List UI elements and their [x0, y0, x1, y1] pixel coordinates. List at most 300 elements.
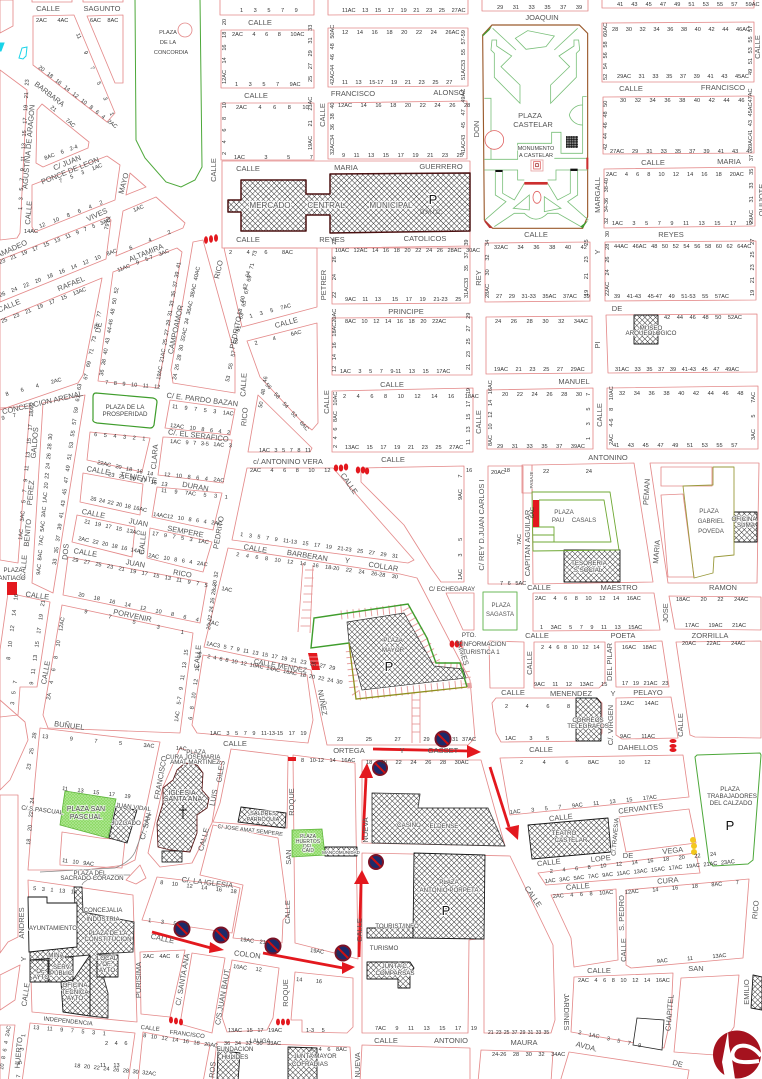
house numbers: 19 21 23 25	[584, 239, 590, 296]
building and plaza labels: AYTO	[33, 974, 49, 981]
house numbers: 9AC 8AC 7AC 5AC 3AC 1AC 20 22 24 26 28 30	[36, 433, 54, 575]
street names: CALLE	[248, 18, 272, 27]
building and plaza labels: A CASTELAR	[519, 153, 553, 159]
ayuntamiento building	[28, 897, 77, 952]
house numbers: 28AC 30 32 34	[485, 240, 491, 298]
arrow: Nueva north	[359, 763, 373, 840]
street names: DE	[671, 1058, 684, 1069]
house numbers: 8 10-12 14 16AC	[301, 758, 355, 764]
building and plaza labels: ELDENSE	[430, 823, 458, 830]
house numbers: 2 4 6 8	[505, 704, 570, 710]
house numbers: 2 4 6 8AC 10 12	[520, 760, 650, 766]
house numbers: 2A 4 6 8 10 12AC	[46, 617, 67, 700]
house numbers: 2 4 6 8AC	[229, 250, 293, 256]
street names: CERVANTES	[618, 801, 664, 816]
house numbers: 2AC 4-6 8 10AC	[609, 386, 615, 445]
street names: C/. VIRGEN	[606, 705, 615, 745]
street names: COLLAR	[368, 560, 399, 573]
building and plaza labels: SACRADO CORAZON	[60, 875, 124, 882]
house numbers: 1AC	[133, 204, 145, 214]
parking symbols: P	[442, 903, 450, 918]
street names: JUAN	[125, 557, 146, 570]
house numbers: 16 18	[466, 468, 510, 474]
house numbers: 41 43 45 47 49 51 53 55 57 59AC	[617, 2, 759, 8]
street names: MARIA	[334, 163, 358, 172]
building and plaza labels: PROSPERIDAD	[102, 411, 148, 418]
house numbers: 2AC 4 6 8 10 12 14 16AC	[535, 596, 641, 602]
bollards: Jaimes	[450, 640, 464, 648]
logo white band	[722, 1031, 735, 1079]
house numbers: 9 7	[1, 413, 17, 422]
house numbers: 29 27 25 23 21 19 17 15 13 11 9 7 5 3 1AC	[72, 557, 233, 594]
building and plaza labels: C/ ECHEGARAY	[429, 586, 475, 593]
street names: CALLE MENDEZ	[253, 658, 308, 675]
street names: FRANCISCO	[152, 755, 169, 800]
house numbers: 56 58 54 52 6AC	[264, 382, 309, 432]
house numbers: 19AC 21	[240, 937, 266, 946]
street names: PONCE DE LEON	[40, 155, 100, 186]
street names: GUERRERO	[419, 162, 463, 171]
house numbers: 27AC 29 31 33 35 37 39 41 43 45	[610, 149, 752, 155]
street names: MARIA	[717, 157, 741, 166]
house numbers: 2AC 4AC	[36, 18, 68, 24]
house numbers: 42 44 46 48 50	[603, 101, 609, 150]
house numbers: 24-26 28 30 32 34AC	[492, 1052, 565, 1058]
inner black building outline	[633, 1018, 664, 1050]
street names: Y	[19, 956, 28, 962]
house numbers: 41AC43 45 47 49AC	[461, 89, 467, 155]
water feature	[0, 43, 27, 59]
street names: AVDA.	[575, 1039, 598, 1054]
building and plaza labels: LALIGA	[249, 1039, 271, 1045]
building and plaza labels: SERV.	[53, 964, 71, 971]
building and plaza labels: PUBLIC.	[50, 970, 74, 977]
street names: CALLE	[73, 546, 98, 559]
street names: NUÑEZ	[316, 689, 329, 716]
street names: CASALS	[572, 517, 596, 524]
house numbers: 30 32 34 36 38 40 42 44 46	[620, 98, 744, 104]
building and plaza labels: AYTO	[99, 967, 115, 974]
street names: DOS	[60, 543, 71, 560]
building and plaza labels: CURA JOSEMARIA	[166, 754, 221, 761]
house numbers: 1AC 3AC 5AC 7AC 9AC 11AC 13AC 15AC 17AC 19AC 21AC 23AC	[545, 859, 735, 885]
no parking signs	[174, 732, 450, 960]
street names: CALLE	[150, 932, 175, 945]
barrier: Pau Casals	[533, 500, 539, 527]
house numbers: 2 4 6 8 10 12 14 16 18 20 22 24	[550, 852, 717, 875]
house numbers: 8AC 10 12 14 16 18 20 22AC	[345, 319, 446, 325]
street names: CALLE	[39, 660, 52, 685]
house numbers: 20 18 16 14 12 10 8 6 4 2AC	[78, 592, 219, 628]
logo	[713, 1030, 761, 1079]
house numbers: 58 60 62 64	[237, 271, 252, 315]
house numbers: 1AC 3 5 7	[234, 155, 313, 161]
small red bar	[288, 757, 296, 761]
street names: CALLE	[355, 918, 364, 942]
street names: CALLE	[339, 471, 360, 496]
house numbers: 21 23 25 27 29	[466, 313, 472, 370]
building and plaza labels: CORREOS	[572, 717, 604, 724]
sign 7	[436, 732, 450, 746]
street names: ALONSO	[433, 88, 465, 97]
saldres parroquia	[238, 807, 286, 828]
house numbers: 12AC 14 16 18 20	[222, 19, 228, 84]
street names: SAN	[284, 849, 293, 865]
street names: C/ E. PARDO BAZAN	[166, 391, 239, 408]
house numbers: 19 21 23 25 27	[750, 239, 756, 296]
building and plaza labels: SALDRES	[250, 811, 276, 817]
street names: MANUEL	[558, 377, 590, 386]
building and plaza labels: PLAZA	[159, 30, 177, 36]
building and plaza labels: C/.S.PASCUAL	[21, 804, 64, 817]
building and plaza labels: MINA	[48, 952, 65, 959]
street names: MAYO	[116, 172, 131, 195]
arrow: Colon east	[263, 953, 355, 974]
house numbers: 23 21 19 17 15 13 11 9 7 5 3AC	[0, 218, 112, 266]
house numbers: 19AC 21AC 25 27 29 31 33 35 37 39 41	[156, 262, 183, 380]
house numbers: 2 4 6 8 10 12 14 16 18AC	[343, 394, 479, 400]
house numbers: 1AC 3 5 7 9AC 11 13 15 17AC	[510, 795, 657, 816]
junta comparsas	[367, 962, 414, 988]
street names: RICO	[239, 407, 250, 427]
house numbers: 18 20 22 24 26 28 30 32AC	[74, 1063, 156, 1078]
building and plaza labels: PLAZA DEL	[73, 870, 107, 877]
street names: FRANCISCO	[701, 83, 745, 92]
street names: CALLE	[86, 464, 111, 477]
street names: CALLE	[381, 455, 405, 464]
street names: SEMPERE	[167, 524, 204, 539]
house numbers: 20 22 24 26 28 30	[502, 392, 582, 398]
house numbers: 79 81	[104, 216, 112, 230]
plaza San Pascual	[60, 791, 116, 838]
street names: VEGA	[662, 845, 684, 856]
house numbers: 3AC 5 7AC	[751, 392, 757, 440]
house numbers: 1-3 5	[306, 1028, 325, 1034]
house numbers: 6 8 10 12 14 16	[188, 651, 204, 720]
street names: COLON	[234, 948, 261, 961]
house numbers: 2AC 4 6 8 10AC	[553, 890, 613, 900]
street names: CALLE	[548, 812, 573, 823]
plaza de la Concordia	[135, 0, 202, 187]
street names: C/. EL SERAFICO	[167, 427, 229, 444]
street names: JOSE	[661, 603, 670, 623]
street names: SAGUNTO	[84, 4, 121, 13]
house numbers: 20 18 16 14 12 10 8 6 4 2AC	[37, 65, 118, 130]
building and plaza labels: OF.	[102, 961, 112, 968]
building and plaza labels: MAYOR	[382, 647, 405, 654]
street names: DE	[612, 304, 622, 313]
house numbers: 37AC	[462, 737, 476, 743]
street names: GALDOS	[29, 427, 40, 459]
building and plaza labels: SANTA ANA	[164, 796, 203, 803]
street names: Y	[610, 689, 616, 698]
bollards: San Roque	[276, 1019, 290, 1025]
street names: NUEVA	[353, 1052, 362, 1078]
tesoreria seguridad social	[564, 550, 620, 582]
house numbers: 28 30 32 34 36 38 40 42 44 46AC	[612, 27, 750, 33]
street names: CALLE	[536, 857, 561, 868]
house numbers: 2 4 6 8 10	[222, 102, 228, 155]
street names: c/.ANTONINO VERA	[253, 457, 323, 466]
street names: CALLE	[524, 230, 548, 239]
street names: DE	[623, 851, 633, 860]
street names: PURISIMA	[134, 962, 143, 998]
building and plaza labels: CONCEJALIA	[84, 907, 123, 914]
street names: RICO	[750, 900, 761, 920]
street names: CALLE	[137, 531, 148, 555]
street names: GILES	[214, 760, 227, 783]
street names: CONCEPCION ARENAL	[1, 389, 84, 416]
house numbers: 39 41-43 45-47 49 51-53 55 57AC	[614, 294, 729, 300]
house numbers: 12 14 16 18 20 22 24 26AC	[342, 30, 459, 36]
house numbers: 9AC 7	[458, 474, 464, 500]
street names: S. PEDRO	[617, 895, 626, 931]
street names: ORTEGA	[333, 746, 365, 755]
street names: POETA	[611, 631, 635, 640]
arrow: Nueva south	[354, 870, 369, 957]
house numbers: 10AC 12	[233, 964, 262, 973]
street names: DURAN	[182, 480, 209, 493]
plaza Castelar	[483, 25, 588, 228]
building and plaza labels: OFICINA	[731, 516, 757, 523]
street names: JOAQUIN	[525, 13, 559, 22]
plaza del Sagrado Corazon road	[40, 812, 150, 885]
street names: CALLE	[209, 158, 218, 182]
street names: CALLE	[374, 1036, 398, 1045]
building and plaza labels: CAID	[302, 848, 314, 854]
building and plaza labels: TRABAJADORES	[707, 793, 757, 800]
house numbers: 12 10 8 6 4 2	[39, 200, 104, 230]
house numbers: 2AC 4 6 8 10 12 14 16 18 20AC	[606, 172, 744, 178]
street names: BUÑUEL	[54, 719, 85, 732]
building and plaza labels: PLAZA	[383, 637, 404, 644]
house numbers: 27 29 31-33 35AC 37AC 39	[496, 294, 590, 300]
street names: CALLE	[525, 631, 549, 640]
street names: GASSET	[428, 746, 459, 755]
building and plaza labels: CASINO	[397, 822, 421, 829]
building and plaza labels: DEL CALZADO	[710, 800, 753, 807]
barrier: Calle Mendez	[308, 653, 320, 670]
house numbers: 9 7 5 3 1	[84, 609, 184, 636]
house numbers: 23 25 27 29 31	[337, 737, 458, 743]
plaza Mayor	[311, 604, 467, 699]
house numbers: 25 27 29 31 33	[308, 25, 314, 82]
street names: CALLE	[641, 158, 665, 167]
building and plaza labels: ARQUEOLOGICO	[626, 330, 677, 337]
house numbers: 1AC 5-7 9 11 13 15	[174, 649, 190, 722]
street names: AGUSTINA DE ARAGON	[20, 104, 37, 189]
olive outline	[349, 643, 467, 699]
green outline	[311, 604, 467, 687]
street names: CALLE	[527, 583, 551, 592]
house numbers: 2 4 6 8 10 12 14	[541, 645, 599, 651]
house numbers: 9 11 13 15 17 19 21 23 25	[342, 153, 463, 159]
house numbers: 9AC 11 13	[345, 297, 381, 303]
building and plaza labels: JUAN VIDAL	[115, 802, 152, 813]
street names: SAGASTA	[486, 612, 514, 618]
house numbers: 8 10 12 14 16	[6, 594, 20, 660]
house numbers: 2AC 22 20 18 16 14AC	[78, 536, 145, 556]
house numbers: 10AC 12AC 14 16 18 20 22 24 26 28AC 30AC	[335, 248, 480, 254]
street names: SAN	[688, 964, 704, 973]
street names: LUIS	[208, 789, 219, 807]
house numbers: 11 13 15 17 19	[62, 786, 131, 800]
street names: CAPITAN AGUILAR	[523, 509, 532, 576]
building and plaza labels: JUNTA C.	[381, 963, 409, 970]
street names: CALLE	[501, 688, 525, 697]
plaza Pau Casals	[532, 492, 619, 551]
cross on church	[179, 805, 187, 819]
plaza de la constitucion	[30, 887, 134, 1018]
sign 3	[266, 938, 280, 954]
house numbers: 16AC 18AC	[622, 645, 657, 651]
house numbers: 7 6 5AC	[500, 581, 526, 587]
street names: CALLE	[474, 410, 483, 434]
sign 2	[214, 928, 228, 942]
parking symbols: P	[726, 818, 734, 833]
house numbers: 3 5 7	[10, 680, 19, 705]
plaza Gabriel Poveda	[683, 467, 734, 578]
house numbers: 29 31 33 35 37 39	[497, 5, 582, 11]
house numbers: 6 4 2	[129, 230, 172, 252]
street names: C/. SANTA ANA	[174, 953, 192, 1006]
street names: BARBARA	[33, 79, 66, 109]
house numbers: 1 3 5 9	[148, 918, 189, 929]
building and plaza labels: AMAT MARTINEZ	[170, 759, 220, 766]
street names: ZORRILLA	[692, 631, 728, 640]
house numbers: 36 38 40 43 44-46 48 50 52	[99, 287, 121, 376]
plaza hatched block	[347, 613, 466, 690]
logo white swoosh	[732, 1046, 761, 1062]
house numbers: 22 24 26 28	[332, 238, 338, 298]
street names: ROS	[207, 1061, 218, 1078]
street names: ANDRES	[17, 907, 26, 939]
house numbers: 1 3 5 7 9	[240, 8, 298, 14]
street names: NUEVA	[361, 817, 370, 843]
building and plaza labels: PLAZA DE LA	[89, 930, 128, 937]
house numbers: 49 51 53 55 57	[748, 26, 754, 75]
house numbers: 12AC 14 16 18 8AC 7	[625, 880, 739, 896]
street names: CALLE	[322, 390, 331, 414]
building and plaza labels: TECNICA	[61, 989, 89, 996]
street names: CALLE	[753, 35, 762, 59]
plaza Trabajadores del Calzado	[695, 753, 761, 866]
house numbers: 2 4 6 8AC	[310, 1047, 347, 1053]
house numbers: 2 4 6 8 10 12 10AC 14AC 16AC 18 20 22 24 30	[207, 654, 343, 686]
house numbers: 8AC 10 12 14 16AC	[488, 380, 494, 446]
house numbers: 22 24	[543, 469, 592, 475]
house numbers: 11AC 13 15 17 19 21 23 25 27AC	[342, 8, 466, 14]
teatro castelar	[528, 818, 611, 859]
juzgado	[109, 807, 137, 843]
building and plaza labels: C/ JOSE AMAT SEMPERE	[217, 824, 283, 838]
house numbers: 26 24 22 20 18 16 14 12 10 8AC	[0, 248, 118, 299]
house numbers: 1 3 5 7 9 11 13 15 17 19 21 23	[18, 79, 31, 210]
building and plaza labels: S.SOCIAL	[574, 567, 603, 574]
street names: PELAYO	[633, 688, 663, 697]
street names: PLAZA	[518, 111, 542, 120]
house numbers: 7AC	[517, 534, 523, 545]
sign 1	[174, 922, 190, 936]
street names: CALLE	[529, 745, 553, 754]
building and plaza labels: PLAZA DE LA	[106, 404, 145, 411]
building and plaza labels: OFICINA	[62, 982, 88, 989]
house numbers: 15 17 19 21-23 25	[392, 297, 461, 303]
street names: REYES	[658, 230, 684, 239]
street names: POVEDA	[698, 528, 725, 535]
street names: EMILIO	[742, 979, 751, 1005]
house numbers: 14 16	[296, 977, 322, 985]
house numbers: 32AC34 36 38 40	[330, 102, 336, 155]
arrow: Colon west	[152, 932, 224, 953]
house numbers: 13AC 15 17 19AC	[228, 1028, 282, 1034]
street names: CASTELAR	[513, 120, 553, 129]
house numbers: 50 48 46	[258, 376, 269, 408]
building and plaza labels: PLAZA SAN	[67, 806, 105, 813]
house numbers: 9AC 11 13AC	[657, 953, 727, 965]
street names: CALLE	[196, 827, 211, 852]
building and plaza labels: PTO.	[462, 632, 476, 639]
house numbers: 7 5 3 1	[16, 1034, 27, 1078]
house numbers: 8 10 12 14 16 18	[160, 880, 237, 895]
house numbers: 2AC 4 6 8 10 12	[250, 468, 330, 474]
street names: PETRER	[319, 269, 328, 300]
street names: PAU	[552, 517, 564, 524]
barrier: Santiago	[7, 582, 17, 595]
street names: MAURA	[510, 1038, 538, 1047]
building and plaza labels: AYUNTAMIENTO	[29, 925, 77, 932]
house numbers: 29AC 31 33 35 37 39 41 43 45AC	[617, 74, 749, 80]
house numbers: 11 10 9AC	[62, 858, 94, 868]
mancomunidad	[325, 847, 357, 856]
building and plaza labels: PLAZA	[720, 786, 741, 793]
house numbers: 41 43 45 47 49 51 53 55 57	[613, 443, 737, 449]
house numbers: 12 10 8 6 4 2AC	[164, 472, 225, 484]
building and plaza labels: FUNDACION	[217, 1046, 253, 1053]
building and plaza labels: C/.TRAVESIA	[610, 817, 621, 856]
oficinas ayuntamiento	[30, 960, 48, 982]
street names: CLARA	[149, 444, 160, 470]
street names: CALLE	[236, 235, 260, 244]
castelar dark grid	[566, 136, 578, 148]
street names: PLAZA	[699, 508, 720, 515]
house numbers: 33 35 37 39 41 43 45 47 49 51 53 55 57 59 61 63	[52, 383, 83, 565]
parking symbols: P	[429, 192, 437, 207]
street names: PEREZ	[25, 480, 36, 506]
street names: VIVES	[85, 206, 109, 223]
street names: TENIENTE	[119, 470, 157, 485]
red and black bars	[483, 26, 588, 228]
street names: Y	[344, 556, 351, 565]
street names: CALLE	[525, 651, 534, 675]
house numbers: 17 9 7 5 3 1AC	[152, 531, 209, 546]
house numbers: 2AC 10 8 6 4 2AC	[148, 553, 208, 568]
street names: RAMON	[709, 583, 737, 592]
street names: REY	[474, 270, 483, 286]
house numbers: 1AC 3 5	[458, 538, 464, 580]
street names: C/. SAN	[138, 812, 153, 841]
street names: LOPE	[590, 853, 611, 864]
street names: PEDRITO	[211, 515, 226, 550]
house numbers: 21 23 25 37 29 31 33 35	[488, 1030, 549, 1036]
street names: PLAZA	[491, 603, 511, 609]
street names: C/S.JUAN BAUT.	[213, 967, 232, 1026]
street names: ROQUE	[287, 788, 296, 816]
house numbers: 1AC 3AC 5 7 9 11 13 15 17 18AC	[18, 403, 36, 540]
house numbers: 7AC 9 11 13 15 17 19	[375, 1026, 477, 1032]
house numbers: 29AC 31 33 35 37	[749, 155, 755, 224]
red closure markers	[7, 234, 676, 1025]
